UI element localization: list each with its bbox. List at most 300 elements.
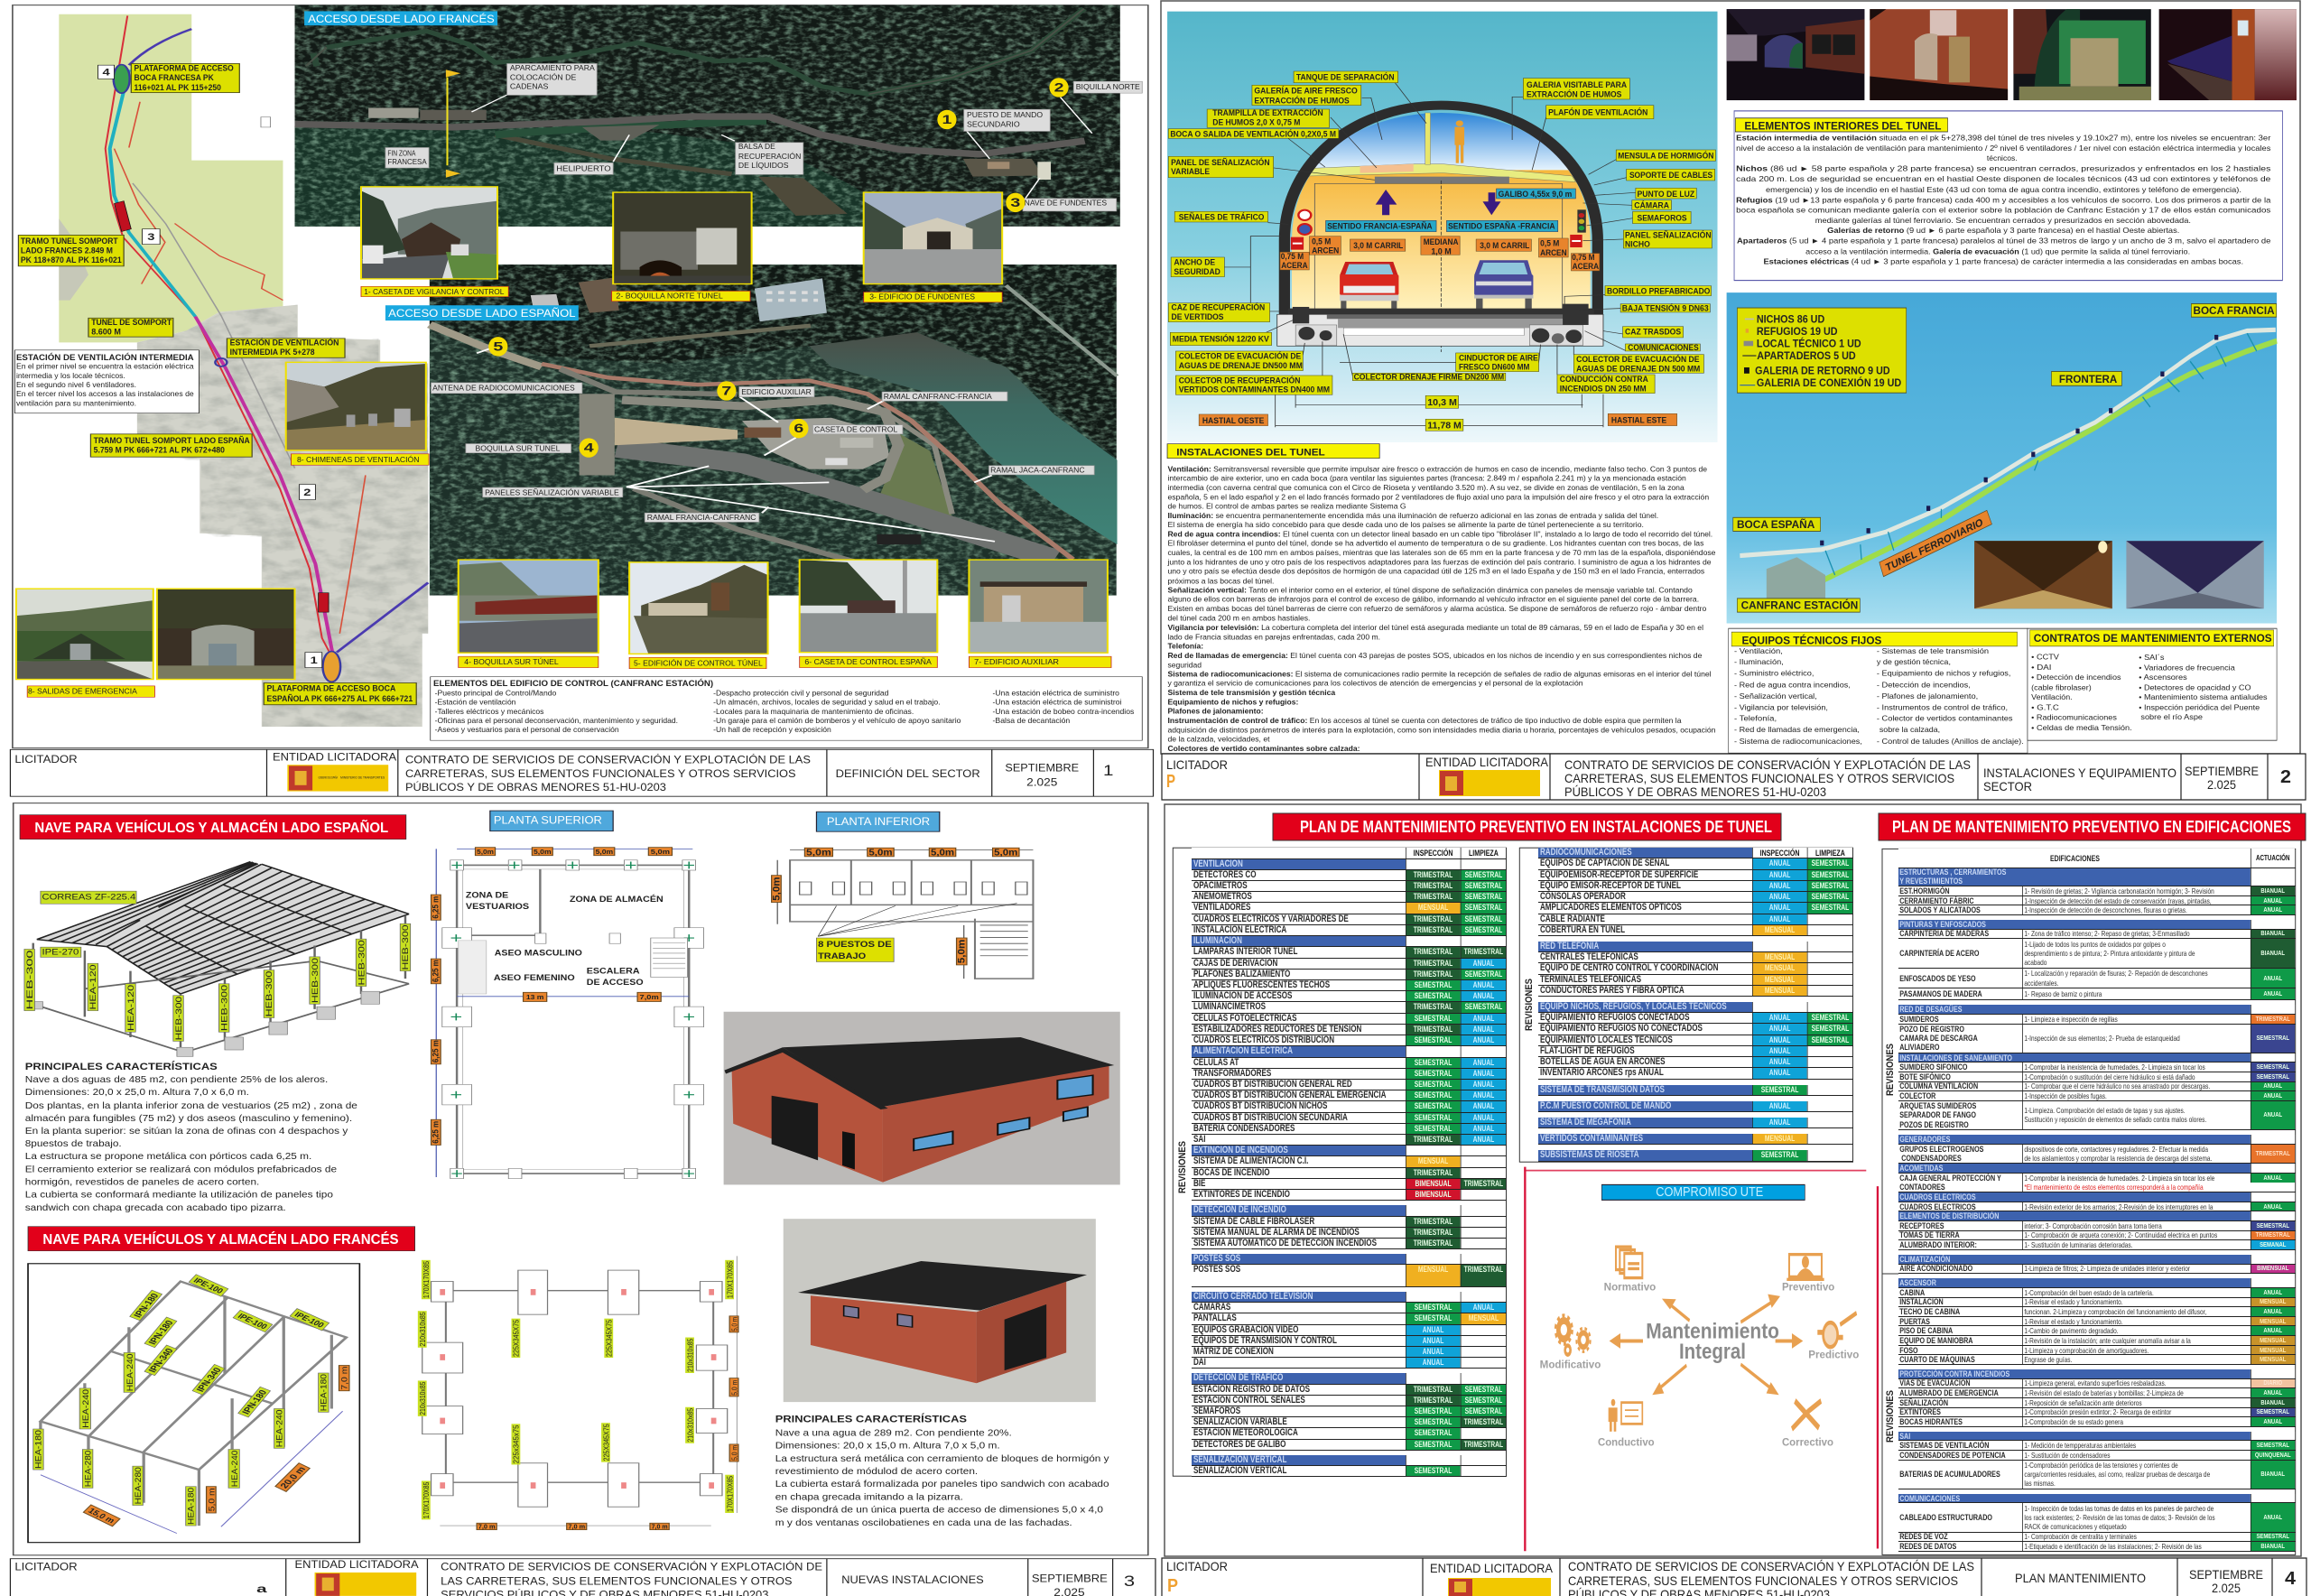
photo: boquilla sur — [459, 560, 599, 653]
heading: COMPROMISO UTE — [1656, 1183, 1763, 1199]
table frames and side labels: REVISIONES — [1885, 1044, 1896, 1096]
satellite callouts: SECUNDARIO — [967, 121, 1020, 129]
diagram: estructura nave francesa: HEA-240 — [230, 1450, 239, 1487]
callout: TANQUE DE SEPARACIÓN — [1296, 72, 1395, 82]
table: edificaciones: BATERIAS DE ACUMULADORES — [1899, 1470, 2000, 1479]
text block: características nave francesa: revestimiento de módulod de acero corten. — [775, 1466, 978, 1477]
satellite callouts: RAMAL FRANCIA-CANFRANC — [647, 515, 756, 523]
text block: instalaciones del túnel: seguridad — [1167, 661, 1202, 670]
title block: hoja 2: P — [1166, 772, 1175, 792]
numbered markers: 7 — [721, 384, 731, 398]
text block: elementos del edificio de control: -Una estación eléctrica de suministroi — [993, 699, 1121, 707]
callout — [1571, 254, 1600, 272]
table: revisiones ventilación, iluminación, detección: TRIMESTRAL — [1414, 1228, 1453, 1237]
callout — [1523, 79, 1629, 99]
title block: hoja 4: LICITADOR — [1166, 1559, 1228, 1573]
table: edificaciones: MENSUAL — [2260, 1317, 2286, 1325]
diagram: estructura nave española: HEB-300 — [311, 957, 320, 1003]
floor plan: planta inferior: 5,0m — [868, 848, 893, 858]
text block: instalaciones del túnel: lado de Francia situadas en parejas enfrentadas, cada 200 m. — [1167, 633, 1380, 642]
text block: características nave francesa: m y dos ventanas oscilobatienes en cada una de las fachadas. — [775, 1517, 1072, 1528]
callout — [1633, 211, 1691, 224]
callout: NICHO — [1625, 240, 1650, 249]
table: revisiones ventilación, iluminación, detección: SEMESTRAL — [1465, 1385, 1502, 1394]
title block: hoja 2: PÚBLICOS Y DE OBRAS MENORES 51-HU-0203 — [1564, 784, 1826, 799]
callout — [1456, 353, 1539, 372]
table: revisiones radiocomunicaciones, telefonía, nichos: INSPECCIÓN — [1760, 848, 1800, 858]
table: revisiones ventilación, iluminación, detección: TRIMESTRAL — [1414, 881, 1453, 890]
table: revisiones ventilación, iluminación, detección: TRIMESTRAL — [1414, 1025, 1453, 1034]
text block: equipos técnicos fijos: - Colector de vertidos contaminantes — [1877, 714, 2013, 723]
map labels: ESPAÑOLA PK 666+275 AL PK 666+721 — [267, 694, 413, 703]
satellite callouts: DE LÍQUIDOS — [738, 162, 789, 170]
callout: PANEL SEÑALIZACIÓN — [1625, 229, 1712, 240]
title block: hoja 2: CARRETERAS, SUS ELEMENTOS FUNCIONALES Y OTROS SERVICIOS — [1564, 771, 1954, 785]
table: revisiones ventilación, iluminación, detección: SEMESTRAL — [1415, 1313, 1452, 1322]
table frames and side labels — [1173, 848, 2296, 1554]
callout: GALERIA VISITABLE PARA — [1527, 81, 1627, 90]
title block: hoja 1: MINISTERIO DE TRANSPORTES — [340, 775, 385, 779]
table: edificaciones: CONDENSADORES — [1901, 1154, 1962, 1163]
floor plan: planta inferior: 8 PUESTOS DE — [818, 941, 892, 950]
table: revisiones ventilación, iluminación, detección: SEMESTRAL — [1465, 1396, 1502, 1405]
table: revisiones ventilación, iluminación, detección: ANUAL — [1423, 1358, 1444, 1367]
floor plan: nave francesa: 210x310x85 — [688, 1339, 695, 1372]
callout — [1425, 395, 1459, 408]
callout: COMUNICACIONES — [1628, 344, 1699, 353]
table: revisiones ventilación, iluminación, detección: SEMESTRAL — [1415, 1113, 1452, 1122]
callout: COLECTOR DE EVACUACIÓN DE — [1179, 351, 1301, 361]
table: edificaciones: CARPINTERÍA DE ACERO — [1899, 949, 1980, 958]
table: revisiones ventilación, iluminación, detección: SEMESTRAL — [1465, 1406, 1502, 1415]
table: revisiones ventilación, iluminación, detección: SEMESTRAL — [1465, 903, 1502, 912]
diagram: estructura nave francesa: HEA-240 — [125, 1353, 135, 1391]
text block: instalaciones del túnel: del túnel cada 200 m en ambos hastiales. — [1167, 614, 1310, 623]
callout: CINDUCTOR DE AIRE — [1459, 354, 1538, 363]
callout — [1168, 128, 1339, 139]
heading: acceso desde lado francés: ACCESO DESDE LADO FRANCÉS — [308, 13, 495, 25]
title block: hoja 1: 1 — [1103, 763, 1113, 779]
diagram: estructura nave española: HEB-300 — [25, 949, 34, 1009]
diagram: estructura nave francesa: HEA-240 — [81, 1388, 90, 1428]
callout: COLECTOR DE RECUPERACIÓN — [1179, 375, 1300, 385]
table: revisiones ventilación, iluminación, detección: TRIMESTRAL — [1414, 870, 1453, 879]
callout — [1627, 169, 1715, 181]
callout: CONDUCCIÓN CONTRA — [1560, 374, 1648, 385]
table: edificaciones: SEMESTRAL — [2256, 1221, 2289, 1229]
map labels: PK 118+870 AL PK 116+021 — [21, 256, 122, 264]
table: revisiones ventilación, iluminación, detección: BIMENSUAL — [1415, 1179, 1452, 1188]
diagram: estructura nave española — [24, 861, 411, 1056]
callout — [1310, 237, 1341, 255]
diagram: estructura nave francesa: HEA-180 — [187, 1487, 196, 1525]
photo: refugio — [2013, 9, 2151, 100]
text block: características nave española: almacén para fungibles (75 m2) y dos aseos (masculino y femenino). — [25, 1113, 352, 1123]
callout: MEDIANA — [1424, 238, 1459, 247]
label — [2051, 372, 2121, 385]
text block: instalaciones del túnel: Colectores de vertido contaminantes sobre calzada: — [1167, 745, 1360, 754]
title block: hoja 1: SEPTIEMBRE — [1005, 762, 1079, 775]
callout: 0,75 M — [1281, 253, 1304, 262]
diagram: estructura nave francesa: 15,0 m — [86, 1507, 116, 1526]
table: edificaciones: BIANUAL — [2260, 1470, 2285, 1478]
text block: contratos de mantenimiento externos: • Variadores de frecuencia — [2139, 663, 2236, 673]
photo: salida de emergencia 2 — [157, 589, 295, 680]
callout — [1326, 220, 1436, 232]
table: revisiones radiocomunicaciones, telefonía, nichos: MENSUAL — [1765, 986, 1796, 995]
floor plan: nave francesa — [418, 1256, 739, 1530]
table: revisiones radiocomunicaciones, telefonía, nichos — [1538, 848, 1853, 1162]
table: edificaciones: RACK de comunicaciones y etiquetado — [2024, 1522, 2127, 1531]
map labels: 3 — [147, 231, 155, 242]
text block: características nave española: sandwich con chapa grecada con acabado tipo pizarra. — [25, 1202, 286, 1213]
table: revisiones ventilación, iluminación, detección: INSPECCIÓN — [1414, 848, 1453, 858]
text block: características nave española: 8puestos de trabajo. — [25, 1138, 122, 1149]
text block: instalaciones del túnel: alguno de ellos con barreras de infrarojos para el control de exceso de gálibo, informando al vehículo infractor en el siguiente panel del corte de la barrera. — [1167, 595, 1699, 604]
title block: hoja 1: CARRETERAS, SUS ELEMENTOS FUNCIONALES Y OTROS SERVICIOS — [405, 767, 796, 780]
map: mapa de trazado del túnel — [59, 14, 428, 727]
table: revisiones ventilación, iluminación, detección — [1192, 848, 1507, 1477]
heading: nave lado español — [20, 815, 406, 840]
text block: características nave francesa: en chapa grecada imitando a la pizarra. — [775, 1492, 963, 1502]
photo: boquilla norte — [613, 192, 752, 284]
map labels: 116+021 AL PK 115+250 — [135, 84, 221, 92]
floor plan: planta superior: 5,0m — [477, 849, 494, 856]
table: revisiones ventilación, iluminación, detección: ANUAL — [1473, 1101, 1495, 1110]
text block: instalaciones del túnel: Telefonía: — [1167, 642, 1203, 651]
callout — [1175, 351, 1303, 371]
text block: contratos de mantenimiento externos: • Detección de incendios — [2031, 673, 2121, 682]
table: edificaciones: ANUAL — [2263, 1288, 2282, 1296]
title block: hoja 4: P — [1167, 1576, 1178, 1596]
floor plan: nave francesa: 210x310x85 — [420, 1381, 427, 1415]
panel: definición del sector — [10, 5, 1154, 796]
text block: estación de ventilación intermedia: En el tercer nivel los accesos a las instalaciones de — [16, 391, 194, 399]
text block: características nave española: El cerramiento exterior se realizará con módulos prefabricados de — [25, 1164, 337, 1174]
arrow: sentido Francia-España — [1376, 190, 1397, 215]
table: revisiones ventilación, iluminación, detección: SEMESTRAL — [1415, 1440, 1452, 1449]
text block: elementos interiores: técnicos. — [1987, 153, 2018, 162]
text block: elementos del edificio de control: -Balsa de decantación — [993, 718, 1070, 725]
text block: instalaciones del túnel: Sistema de radiocomunicaciones: El sistema de comunicaciones radio permite la recepción de señales de radio de algunas emisoras en el interior del túnel — [1167, 670, 1712, 679]
table: revisiones radiocomunicaciones, telefonía, nichos: ANUAL — [1769, 1057, 1791, 1066]
callout — [1605, 286, 1712, 296]
text block: elementos interiores: Refugios (19 ud ►13 parte española y 6 parte francesa) cada 400 m y accesibles a los vehículos de socorro. Los dos primeros a partir de la — [1736, 195, 2271, 205]
text block: estación de ventilación intermedia: En el primer nivel se encuentra la estación eléctrica — [16, 363, 194, 371]
text block: características nave española: La cubierta se conformará mediante la utilización de paneles tipo — [25, 1190, 333, 1200]
table: revisiones ventilación, iluminación, detección: ANUAL — [1473, 1035, 1495, 1044]
callout: DE HUMOS 2,0 X 0,75 M — [1212, 118, 1300, 127]
text block: contratos de mantenimiento externos: • CCTV — [2031, 653, 2059, 662]
floor plan: planta superior: ASEO MASCULINO — [495, 950, 582, 958]
heading: plan mantenimiento edificaciones — [1879, 813, 2306, 840]
text block: elementos del edificio de control — [431, 677, 1142, 740]
callout: 11,78 M — [1427, 421, 1462, 431]
numbered markers: 6 — [794, 422, 803, 435]
floor plan: planta superior: 13 m — [526, 994, 543, 1001]
table: revisiones ventilación, iluminación, detección: TRIMESTRAL — [1414, 1217, 1453, 1226]
text block: equipos técnicos fijos: y de gestión técnica, — [1877, 657, 1951, 666]
callout: CAZ DE RECUPERACIÓN — [1172, 302, 1265, 312]
numbered markers: 5 — [493, 339, 503, 354]
diagram: estructura nave española: HEB-300 — [357, 939, 367, 985]
icon: normativo — [1616, 1247, 1642, 1278]
text block: instalaciones del túnel: Equipamiento de nichos y refugios: — [1167, 698, 1298, 707]
table: revisiones ventilación, iluminación, detección: SEMESTRAL — [1415, 1124, 1452, 1133]
table: edificaciones: ANUAL — [2263, 1307, 2282, 1315]
label: Conductivo — [1598, 1437, 1655, 1449]
callout: ACERA — [1281, 262, 1308, 271]
map labels: 4 — [102, 66, 110, 78]
callout: ACERA — [1573, 263, 1599, 272]
callout — [1623, 229, 1712, 249]
floor plan: nave francesa: 210x310x85 — [420, 1312, 427, 1347]
satellite callouts: APARCAMIENTO PARA — [510, 64, 595, 72]
table: edificaciones: 1- Repaso de barniz o pintura — [2024, 989, 2102, 998]
table: revisiones ventilación, iluminación, detección: ANUAL — [1423, 1325, 1444, 1334]
table: revisiones ventilación, iluminación, detección: ANUAL — [1473, 1014, 1495, 1023]
callout: GALERÍA DE AIRE FRESCO — [1254, 86, 1358, 96]
table: edificaciones: TRIMESTRAL — [2256, 1149, 2290, 1157]
title block: hoja 3 — [10, 1558, 1156, 1596]
diagram: estructura nave francesa: HEA-180 — [34, 1429, 43, 1469]
title block: hoja 1: CONTRATO DE SERVICIOS DE CONSERVACIÓN Y EXPLOTACIÓN DE LAS — [405, 754, 811, 766]
text block: instalaciones del túnel: Red de llamadas de emergencia: El túnel cuenta con 43 parejas de postes SOS, ubicados en los nichos de incendio y en sus correspondientes nichos de — [1167, 652, 1702, 661]
table: revisiones ventilación, iluminación, detección: MENSUAL — [1418, 1156, 1449, 1165]
diagram: estructura nave francesa: 20,0 m — [279, 1465, 309, 1490]
text block: contratos de mantenimiento externos: • Inspección periódica del Puente — [2139, 702, 2260, 712]
table: edificaciones: Sustitución y reposición de elementos de sellado contra malos olores. — [2024, 1115, 2206, 1124]
label — [1737, 598, 1860, 612]
table: edificaciones: 1-Comprobar la inexistencia de humedades. 2- Limpieza sin tocar los ele — [2024, 1174, 2214, 1183]
callout: CAZ TRASDOS — [1625, 328, 1681, 337]
text block: estación de ventilación intermedia: ventilación para su mantenimiento. — [16, 400, 136, 408]
callout: SEGURIDAD — [1174, 268, 1220, 277]
numbered markers: 3 — [1010, 196, 1020, 209]
map labels: TRAMO TUNEL SOMPORT — [21, 237, 118, 246]
floor plan: planta inferior: 5,0m — [771, 877, 783, 901]
floor plan: nave francesa: 7,0 m — [478, 1523, 496, 1530]
table: revisiones radiocomunicaciones, telefonía, nichos: ANUAL — [1769, 914, 1791, 923]
title block: hoja 4: CARRETERAS, SUS ELEMENTOS FUNCIONALES Y OTROS SERVICIOS — [1568, 1573, 1958, 1588]
text block: características nave francesa: La estructura será metálica con cerramiento de bloques de hormigón y — [775, 1453, 1109, 1463]
satellite callouts: ANTENA DE RADIOCOMUNICACIONES — [432, 385, 575, 393]
table: revisiones ventilación, iluminación, detección: MENSUAL — [1418, 1265, 1449, 1274]
table: revisiones ventilación, iluminación, detección: ANUAL — [1473, 1058, 1495, 1067]
text block: elementos del edificio de control: -Despacho protección civil y personal de seguridad — [713, 690, 888, 698]
callout — [1170, 332, 1272, 346]
text block: características nave española — [25, 1061, 357, 1213]
diagram: sección transversal del túnel — [1167, 12, 1718, 442]
title block: hoja 1: LICITADOR — [14, 754, 78, 766]
text block: elementos interiores: Estación intermedia de ventilación situada en el pk 5+278,398 del túnel de tres niveles y 19.10x27 m), entre los niveles se encuentran: 3er — [1736, 134, 2271, 143]
text block: contratos de mantenimiento externos: • SAI´s — [2139, 653, 2165, 662]
floor plan: nave francesa: 210x310x85 — [688, 1408, 695, 1443]
table: revisiones ventilación, iluminación, detección: TRIMESTRAL — [1414, 1396, 1453, 1405]
table: revisiones ventilación, iluminación, detección: SEMESTRAL — [1415, 1014, 1452, 1023]
table: edificaciones: MENSUAL — [2260, 1336, 2286, 1344]
table: revisiones radiocomunicaciones, telefonía, nichos: ANUAL — [1769, 903, 1791, 912]
text block: instalaciones del túnel: Sistema de tele transmisión y gestión técnica — [1167, 689, 1336, 698]
satellite callouts — [385, 63, 1142, 523]
diagram: estructura nave francesa: HEA-240 — [274, 1409, 284, 1447]
table: edificaciones — [1898, 849, 2296, 1552]
heading: nave lado español: NAVE PARA VEHÍCULOS Y ALMACÉN LADO ESPAÑOL — [34, 819, 388, 836]
photo: edificio auxiliar — [969, 560, 1108, 653]
floor plan: planta superior: ZONA DE ALMACÉN — [570, 895, 664, 904]
map labels — [18, 63, 416, 705]
text block: elementos del edificio de control: -Una estación eléctrica de suministro — [993, 690, 1119, 698]
satellite callouts: FIN ZONA — [387, 150, 416, 158]
table: edificaciones: TRIMESTRAL — [2256, 1231, 2290, 1239]
title block: hoja 2: SEPTIEMBRE — [2185, 764, 2259, 778]
table: revisiones radiocomunicaciones, telefonía, nichos: SEMESTRAL — [1812, 892, 1849, 901]
diagram: estructura nave española: IPE-270 — [42, 947, 79, 957]
satellite callouts: HELIPUERTO — [556, 165, 611, 173]
diagram: estructura nave española: HEA-120 — [126, 984, 135, 1031]
numbered markers — [488, 78, 1069, 458]
table: edificaciones: 1-Lijado de todos los puntos de oxidados por golpes o — [2024, 940, 2166, 949]
floor plan: nave francesa: 170X170X85 — [728, 1476, 735, 1512]
table: edificaciones: 1-Limpieza. Comprobación del estado de tapas y sus ajustes. — [2024, 1106, 2186, 1115]
table: revisiones ventilación, iluminación, detección: ANUAL — [1473, 1135, 1495, 1144]
text block: instalaciones del túnel — [1167, 444, 1715, 754]
callout: SENTIDO ESPAÑA -FRANCIA — [1448, 221, 1555, 231]
title block: hoja 3: ENTIDAD LICITADORA — [295, 1558, 419, 1571]
text block: equipos técnicos fijos: - Suministro eléctrico, — [1734, 669, 1814, 678]
photo captions: 8- CHIMENEAS DE VENTILACIÓN — [297, 455, 419, 464]
icon: preventivo — [1787, 1255, 1824, 1279]
callout — [1294, 71, 1398, 83]
table: revisiones radiocomunicaciones, telefonía, nichos: ANUAL — [1769, 1068, 1791, 1077]
table: revisiones radiocomunicaciones, telefonía, nichos: MENSUAL — [1765, 963, 1796, 972]
table: edificaciones: las mismas. — [2024, 1479, 2056, 1488]
table: revisiones radiocomunicaciones, telefonía, nichos: MENSUAL — [1765, 925, 1796, 934]
text block: elementos del edificio de control: -Puesto principal de Control/Mando — [435, 690, 557, 698]
table: revisiones ventilación, iluminación, detección: TRIMESTRAL — [1464, 1265, 1503, 1274]
table: revisiones ventilación, iluminación, detección: SEMESTRAL — [1415, 1035, 1452, 1044]
satellite: acceso lado francés — [295, 5, 1120, 227]
table: revisiones radiocomunicaciones, telefonía, nichos: ANUAL — [1769, 858, 1791, 868]
satellite callouts: COLOCACIÓN DE — [510, 74, 577, 82]
table: edificaciones: ANUAL — [2263, 1082, 2282, 1090]
callout — [1168, 156, 1274, 178]
callout: SOPORTE DE CABLES — [1629, 172, 1712, 181]
table frames and side labels: REVISIONES — [1177, 1141, 1188, 1193]
table: edificaciones: BIANUAL — [2260, 930, 2285, 937]
text block: elementos del edificio de control: ELEMENTOS DEL EDIFICIO DE CONTROL (CANFRANC ESTACIÓN) — [433, 679, 713, 688]
label: FRONTERA — [2059, 375, 2118, 385]
text block: elementos interiores: emergencia) y los de incendio en el hastial Este (43 ud con toma de agua contra incendio, extintores y teléfono de emergencia). — [1766, 185, 2241, 194]
photo: edificio de control túnel — [629, 562, 768, 654]
callout: MENSULA DE HORMIGÓN — [1618, 151, 1713, 161]
text block: equipos técnicos fijos: - Vigilancia por televisión, — [1734, 702, 1828, 712]
heading: plan mantenimiento instalaciones de túnel: PLAN DE MANTENIMIENTO PREVENTIVO EN INSTALACIONES DE TUNEL — [1300, 818, 1772, 836]
text block: contratos de mantenimiento externos: • DAI — [2031, 663, 2051, 672]
table: revisiones ventilación, iluminación, detección: TRIMESTRAL — [1414, 1002, 1453, 1011]
render 3D: nave española — [724, 1012, 1120, 1184]
floor plan: nave francesa: 225X345X75 — [514, 1320, 521, 1357]
table: revisiones radiocomunicaciones, telefonía, nichos: ANUAL — [1769, 1046, 1791, 1055]
callout: TRAMPILLA DE EXTRACCIÓN — [1212, 107, 1323, 118]
table: edificaciones: CONTADORES — [1899, 1183, 1945, 1192]
table: edificaciones: accidentales. — [2024, 979, 2058, 988]
numbered markers: 4 — [584, 441, 594, 455]
text block: características nave francesa: Dimensiones: 20,0 x 15,0 m. Altura 7,0 x 5,0 m. — [775, 1441, 1000, 1451]
table: revisiones ventilación, iluminación, detección: ANUAL — [1473, 980, 1495, 989]
map labels: 1 — [311, 654, 318, 665]
title block: hoja 4: 4 — [2285, 1569, 2297, 1589]
title block: hoja 4 — [1162, 1558, 2306, 1596]
legend: GALERIA DE RETORNO 9 UD — [1755, 366, 1890, 377]
floor plan: planta inferior: 5,0m — [956, 939, 968, 963]
title block: hoja 1: DEFINICIÓN DEL SECTOR — [836, 767, 980, 780]
map labels: TUNEL DE SOMPORT — [91, 319, 172, 328]
heading: nave lado francés — [28, 1227, 415, 1251]
text block: instalaciones del túnel: El fibroláser determina el punto del túnel, donde se ha advertido el aumento de temperatura o de su gradiente. Los hidrantes cuentan con tres bocas, de las — [1167, 539, 1704, 548]
heading — [1601, 1183, 1805, 1200]
table: revisiones ventilación, iluminación, detección: SEMESTRAL — [1465, 870, 1502, 879]
table: edificaciones: ENFOSCADOS DE YESO — [1899, 974, 1976, 983]
text block: contratos de mantenimiento externos: • Radiocomunicaciones — [2031, 713, 2117, 722]
table: revisiones radiocomunicaciones, telefonía, nichos: SEMESTRAL — [1812, 858, 1849, 868]
floor plan: planta superior: 7,0m — [640, 994, 659, 1001]
diagram: estructura nave francesa: IPE-100 — [191, 1276, 225, 1295]
title block: hoja 1: PÚBLICOS Y DE OBRAS MENORES 51-HU-0203 — [405, 782, 666, 793]
text block: contratos de mantenimiento externos: sobre el río Aspe — [2140, 712, 2203, 721]
central text: Mantenimiento — [1646, 1320, 1779, 1344]
heading: planta inferior: PLANTA INFERIOR — [827, 815, 930, 828]
table: edificaciones: ANUAL — [2263, 1417, 2282, 1425]
title block: hoja 4: SEPTIEMBRE — [2189, 1567, 2263, 1582]
table: edificaciones: acabado — [2024, 958, 2046, 967]
icon: señales de tráfico — [1291, 210, 1312, 250]
label: Predictivo — [1808, 1350, 1859, 1361]
text block: instalaciones del túnel: uno y otro país se efectúa desde dos depósitos de hormigón de una capacidad útil de 125 m3 en el lado España y de 150 m3 en el lado Francia, enterrados — [1167, 567, 1704, 576]
map labels: 8.600 M — [91, 328, 121, 337]
table: edificaciones: ANUAL — [2263, 974, 2282, 982]
text block: equipos técnicos fijos: - Plafones de jalonamiento, — [1877, 691, 1978, 701]
table: edificaciones: EDIFICACIONES — [2050, 854, 2100, 863]
photo captions: 6- CASETA DE CONTROL ESPAÑA — [804, 657, 932, 667]
table: revisiones ventilación, iluminación, detección: SEMESTRAL — [1465, 881, 1502, 890]
satellite callouts: CASETA DE CONTROL — [814, 426, 898, 434]
table: revisiones ventilación, iluminación, detección: ANUAL — [1473, 1113, 1495, 1122]
text block: instalaciones del túnel: Vigilancia por televisión: La cobertura completa del interior del túnel está asegurada mediante un total de 89 cámaras, 59 en el lado de España y 30 en el — [1167, 624, 1703, 633]
table: revisiones ventilación, iluminación, detección: TRIMESTRAL — [1414, 1168, 1453, 1177]
diagram: estructura nave francesa: IPN-180 — [132, 1292, 162, 1319]
map labels: PLATAFORMA DE ACCESO BOCA — [267, 684, 395, 693]
car: rojo — [1340, 262, 1398, 309]
map labels: ESTACIÓN DE VENTILACIÓN — [230, 339, 339, 348]
text block: elementos del edificio de control: -Locales para la maquinaria de mantenimiento de oficinas. — [713, 708, 914, 716]
car: azul — [1474, 260, 1533, 309]
callout — [1616, 150, 1715, 161]
callout: SEÑALES DE TRÁFICO — [1179, 211, 1265, 222]
diagram: estructura nave francesa — [28, 1264, 359, 1543]
floor plan: planta superior: DE ACCESO — [587, 979, 644, 987]
callout: 0,75 M — [1572, 254, 1595, 263]
heading: INSTALACIONES DEL TUNEL — [1176, 447, 1325, 458]
text block: contratos de mantenimiento externos: CONTRATOS DE MANTENIMIENTO EXTERNOS — [2034, 634, 2272, 645]
legend: APARTADEROS 5 UD — [1757, 351, 1856, 362]
table: revisiones ventilación, iluminación, detección: ANUAL — [1473, 991, 1495, 1000]
satellite callouts: EDIFICIO AUXILIAR — [741, 388, 812, 396]
callout — [1623, 327, 1684, 338]
central text: Integral — [1679, 1341, 1746, 1364]
floor plan: planta superior: VESTUARIOS — [466, 903, 530, 911]
table: edificaciones: ACTUACIÓN — [2256, 854, 2289, 862]
